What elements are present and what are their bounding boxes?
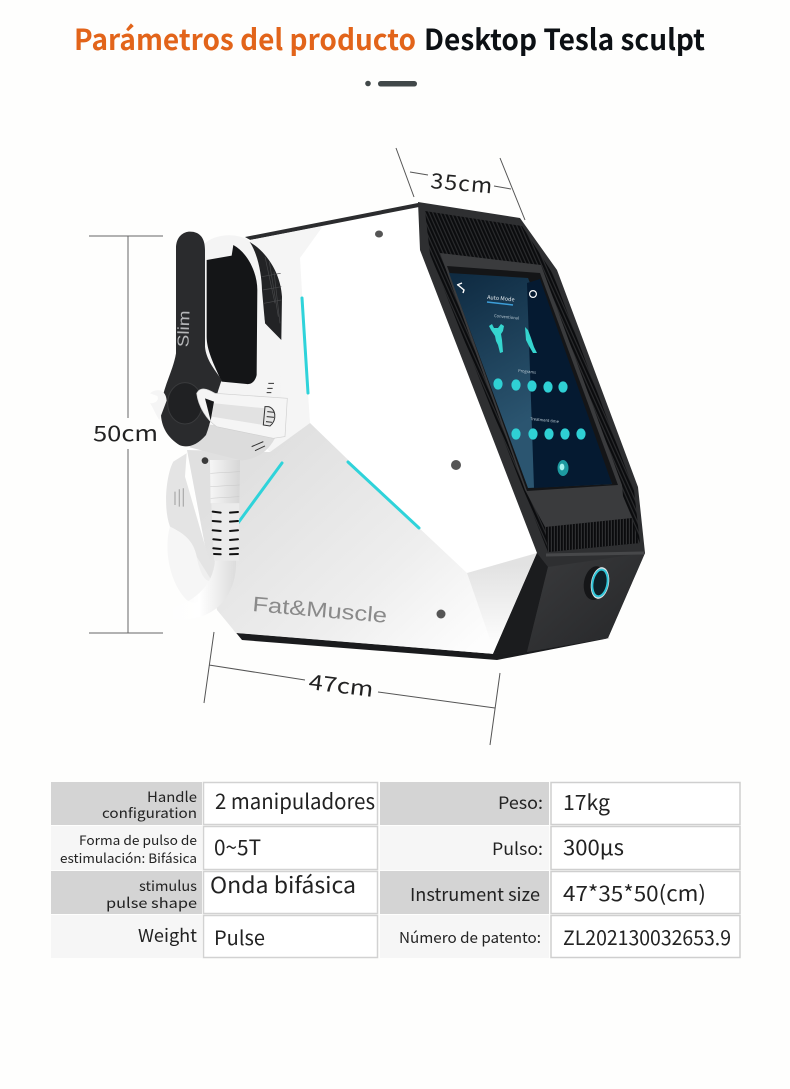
cable neck <box>210 460 240 503</box>
black applicator <box>161 232 222 446</box>
table row 1: configuration <box>102 803 197 823</box>
rear handpiece <box>166 453 215 581</box>
table row 2: 0~5T <box>214 832 261 862</box>
table row 2: Forma de pulso de <box>79 830 197 849</box>
table row 3: Instrument size <box>410 881 540 907</box>
cyan accent lines <box>238 298 419 528</box>
lower shell <box>189 423 277 461</box>
table row 2: estimulación: Bifásica <box>60 848 197 867</box>
left strap loop <box>150 390 167 420</box>
table row 3: Onda bifásica <box>210 868 356 900</box>
table row 2: 300µs <box>563 832 624 862</box>
screen treatment buttons <box>493 378 586 440</box>
handle strap <box>197 389 287 438</box>
body screw holes <box>375 230 461 618</box>
device illustration <box>150 202 645 660</box>
table row 4: Número de patento: <box>399 927 541 948</box>
cable vents <box>211 503 239 561</box>
table row 4: ZL202130032653.9 <box>563 922 731 951</box>
dimension: 35cm depth: 35cm <box>429 165 495 200</box>
title <box>74 17 705 59</box>
rear handpiece latch <box>202 457 208 464</box>
touch screen: Conventional <box>494 313 519 322</box>
screen heading: Auto Mode <box>487 293 515 303</box>
touch screen: Programs <box>518 368 536 376</box>
specification table <box>51 782 740 958</box>
touch screen: Treatment time <box>530 416 560 425</box>
table row 3: 47*35*50(cm) <box>563 878 706 908</box>
touch screen <box>447 266 618 491</box>
screen settings icon <box>530 291 536 297</box>
dimension: 35cm depth <box>396 148 525 220</box>
table row 3: stimulus <box>139 876 197 896</box>
table row 3: pulse shape <box>106 893 197 913</box>
device body <box>187 203 610 660</box>
table row 1: Peso: <box>498 789 543 814</box>
power knob <box>581 564 612 602</box>
screen back arrow <box>457 283 464 293</box>
table row 1: 2 manipuladores <box>215 786 375 816</box>
vent marks <box>267 383 274 393</box>
shell dark fin <box>245 239 282 340</box>
title: Desktop Tesla sculpt <box>424 17 705 59</box>
table row 4: Pulse <box>214 922 265 951</box>
dimension: 47cm width: 47cm <box>307 666 375 704</box>
Slim label: Slim <box>175 310 194 347</box>
table row 4: Weight <box>138 922 197 948</box>
handpiece assembly <box>150 232 287 620</box>
shell opening <box>207 245 257 384</box>
table row 2 <box>51 826 740 870</box>
handle cable <box>163 560 236 620</box>
table row 3 <box>51 868 740 914</box>
white shell <box>193 235 281 423</box>
dimension: 50cm height: 50cm <box>93 418 158 448</box>
table row 4 <box>51 915 740 958</box>
screen start button <box>558 460 568 476</box>
brand label: Fat&Muscle <box>252 593 388 628</box>
table row 1: 17kg <box>563 787 610 817</box>
title: Parámetros del producto <box>74 17 416 59</box>
screen body figures <box>489 324 537 353</box>
applicator disc <box>168 383 202 424</box>
table row 2: Pulso: <box>492 835 543 860</box>
title ornament <box>365 81 417 86</box>
table row 1: Handle <box>147 787 197 807</box>
dimension: 50cm height <box>89 236 163 633</box>
front control panel <box>418 202 645 654</box>
table row 1 <box>51 782 740 825</box>
dimension: 47cm width <box>204 632 500 745</box>
